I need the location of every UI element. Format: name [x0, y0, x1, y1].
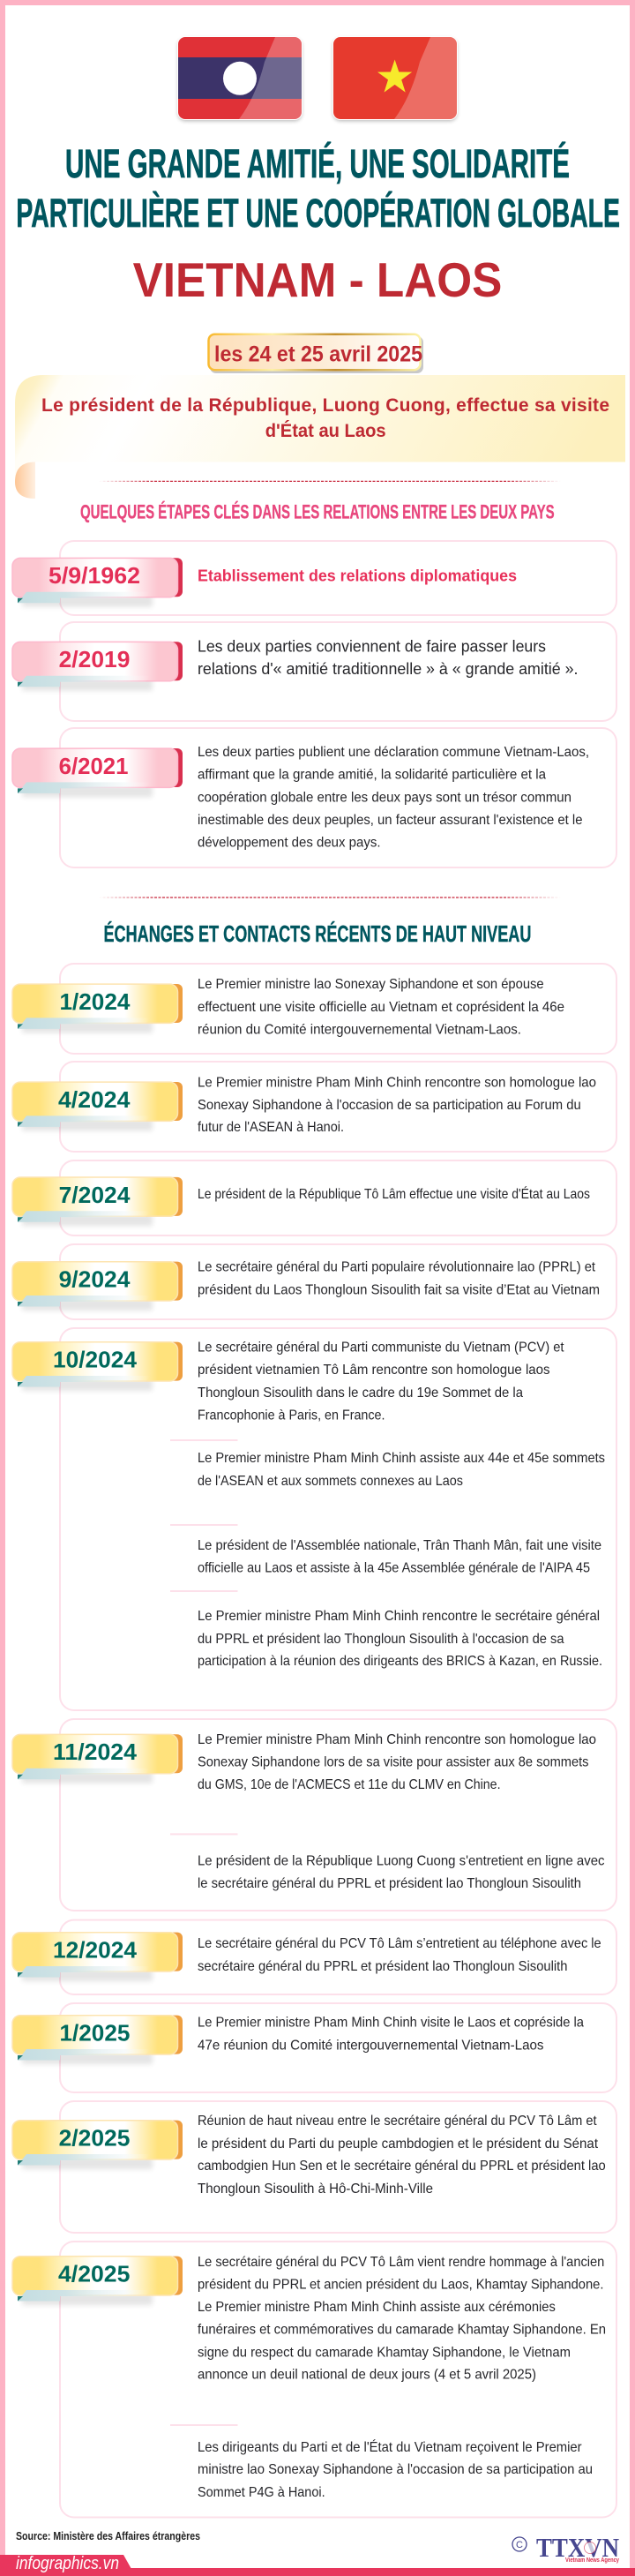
icon: flag of Laos: [177, 36, 303, 121]
card: 5/9/1962: 5/9/1962: [49, 564, 140, 589]
panel: recent high-level exchanges: [12, 964, 616, 2517]
logo: TTXVN: C: [516, 2540, 523, 2550]
card: 7/2024: [12, 1160, 616, 1235]
card: 1/2024: Le Premier ministre lao Sonexay Siphandone et son épouse: [198, 977, 544, 992]
footer bar: infographics.vn: [0, 2554, 635, 2576]
card: 5/9/1962: Etablissement des relations diplomatiques: [198, 567, 517, 584]
card: 2/2025: Thongloun Sisoulith à Hô-Chi-Minh-Ville: [198, 2182, 433, 2197]
card: 2/2019: 2/2019: [59, 648, 130, 672]
card: 10/2024: Thongloun Sisoulith dans le cadre du 19e Sommet de la: [198, 1386, 523, 1401]
card: 4/2024: futur de l'ASEAN à Hanoi.: [198, 1120, 344, 1135]
card: 11/2024: Le président de la République Luong Cuong s'entretient en ligne avec: [198, 1854, 605, 1869]
card: 9/2024: [12, 1244, 616, 1319]
card: 11/2024: Le Premier ministre Pham Minh Chinh rencontre son homologue lao: [198, 1732, 596, 1747]
card: 6/2021: [12, 728, 616, 867]
card: 4/2024: Sonexay Siphandone à l'occasion de sa participation au Forum du: [198, 1098, 581, 1113]
card: 9/2024: président du Laos Thongloun Sisoulith fait sa visite d’Etat au Vietnam: [198, 1283, 600, 1297]
title: [16, 141, 620, 236]
card: 1/2025: 47e réunion du Comité intergouvernemental Vietnam-Laos: [198, 2038, 543, 2053]
card: 12/2024: [12, 1920, 616, 1994]
card: 2/2025: 2/2025: [59, 2127, 130, 2152]
card: 4/2025: Les dirigeants du Parti et de l'État du Vietnam reçoivent le Premier: [198, 2438, 582, 2455]
card: 4/2025: Le secrétaire général du PCV Tô Lâm vient rendre hommage à l'ancien: [198, 2255, 604, 2270]
card: 11/2024: [12, 1719, 616, 1911]
card: 1/2024: [12, 964, 616, 1054]
card: 6/2021: coopération globale entre les deux pays sont un trésor commun: [198, 790, 572, 805]
card: 2/2025: cambodgien Hun Sen et le secrétaire général du PPRL et président lao: [198, 2159, 606, 2174]
card: 4/2025: président du PPRL et ancien président du Laos, Khamtay Siphandone.: [198, 2277, 603, 2292]
card: 2/2019: relations d'« amitié traditionnelle » à « grande amitié ».: [198, 660, 579, 678]
card: 4/2025: ministre lao Sonexay Siphandone à l'occasion de sa participation au: [198, 2462, 593, 2477]
date badge: les 24 et 25 avril 2025: [214, 342, 422, 367]
card: 4/2024: [12, 1062, 616, 1152]
card: 9/2024: 9/2024: [59, 1267, 131, 1292]
card: 1/2025: Le Premier ministre Pham Minh Chinh visite le Laos et copréside la: [198, 2016, 584, 2031]
card: 6/2021: 6/2021: [59, 755, 129, 779]
card: 9/2024: Le secrétaire général du Parti populaire révolutionnaire lao (PPRL) et: [198, 1260, 596, 1274]
card: 10/2024: du PPRL et président lao Thongloun Sisoulith à l'occasion de sa: [198, 1632, 564, 1647]
footer bar: infographics.vn: infographics.vn: [16, 2554, 119, 2573]
card: 6/2021: affirmant que la grande amitié, la solidarité particulière et la: [198, 768, 546, 783]
card: 2/2019: Les deux parties conviennent de faire passer leurs: [198, 637, 546, 655]
card: 7/2024: Le président de la République Tô Lâm effectue une visite d'État au Laos: [198, 1185, 590, 1202]
card: 4/2025: signe du respect du camarade Khamtay Siphandone, le Vietnam: [198, 2345, 571, 2360]
card: 2/2025: le président du Parti du peuple cambdogien et le président du Sénat: [198, 2137, 599, 2152]
card: 11/2024: Sonexay Siphandone lors de sa visite pour assister aux 8e sommets: [198, 1754, 589, 1770]
card: 4/2025: Sommet P4G à Hanoi.: [198, 2485, 325, 2500]
card: 1/2024: 1/2024: [60, 990, 131, 1015]
card: 10/2024: officielle au Laos et assiste à la 45e Assemblée générale de l'AIPA 45: [198, 1560, 590, 1575]
card: 10/2024: Le Premier ministre Pham Minh Chinh assiste aux 44e et 45e sommets: [198, 1451, 605, 1466]
card: 10/2024: Le secrétaire général du Parti communiste du Vietnam (PCV) et: [198, 1341, 564, 1356]
card: 1/2025: 1/2025: [60, 2021, 130, 2046]
card: 10/2024: Le président de l'Assemblée nationale, Trân Thanh Mân, fait une visite: [198, 1538, 601, 1553]
card: 4/2025: 4/2025: [58, 2263, 130, 2287]
card: 2/2019: [12, 622, 616, 721]
card: 4/2024: Le Premier ministre Pham Minh Chinh rencontre son homologue lao: [198, 1075, 596, 1091]
card: 5/9/1962: [12, 541, 616, 615]
card: 10/2024: Le Premier ministre Pham Minh Chinh rencontre le secrétaire général: [198, 1609, 600, 1624]
card: 10/2024: 10/2024: [53, 1348, 138, 1373]
card: 12/2024: secrétaire général du PPRL et président lao Thongloun Sisoulith: [198, 1959, 568, 1974]
card: 10/2024: de l'ASEAN et aux sommets connexes au Laos: [198, 1474, 463, 1489]
card: 7/2024: 7/2024: [59, 1183, 131, 1208]
card: 4/2025: annonce un deuil national de deux jours (4 et 5 avril 2025): [198, 2368, 536, 2383]
icon: flag of Vietnam: [332, 36, 458, 121]
banner: visit announcement: [15, 375, 625, 499]
logo: TTXVN: Vietnam News Agency: [565, 2557, 619, 2564]
logo: TTXVN: [512, 2532, 619, 2564]
banner: visit announcement: Le président de la République, Luong Cuong, effectue sa visite: [41, 395, 609, 416]
card: 6/2021: inestimable des deux peuples, un facteur assurant l'existence et le: [198, 813, 582, 828]
card: 11/2024: du GMS, 10e de l'ACMECS et 11e du CLMV en Chine.: [198, 1777, 501, 1792]
card: 1/2024: réunion du Comité intergouvernemental Vietnam-Laos.: [198, 1022, 521, 1038]
card: 10/2024: Francophonie à Paris, en France.: [198, 1408, 385, 1423]
card: 4/2024: 4/2024: [58, 1088, 131, 1113]
card: 10/2024: président vietnamien Tô Lâm rencontre son homologue laos: [198, 1363, 550, 1378]
card: 1/2024: effectuent une visite officielle au Vietnam et coprésident la 46e: [198, 1000, 564, 1015]
card: 4/2025: funéraires et commémoratives du camarade Khamtay Siphandone. En: [198, 2323, 606, 2338]
card: 12/2024: Le secrétaire général du PCV Tô Lâm s’entretient au téléphone avec le: [198, 1936, 601, 1951]
card: 11/2024: le secrétaire général du PPRL et président lao Thongloun Sisoulith: [198, 1876, 581, 1891]
logo: TTXVN: TTXVN: [536, 2532, 619, 2563]
subtitle: Vietnam - Laos: VIETNAM - LAOS: [133, 253, 502, 307]
card: 11/2024: 11/2024: [53, 1740, 138, 1765]
card: 4/2025: [12, 2242, 616, 2517]
source note: Source: Ministère des Affaires étrangères: [16, 2530, 200, 2542]
card: 6/2021: Les deux parties publient une déclaration commune Vietnam-Laos,: [198, 745, 589, 760]
card: 2/2025: Réunion de haut niveau entre le secrétaire général du PCV Tô Lâm et: [198, 2114, 597, 2129]
card: 10/2024: [12, 1328, 616, 1710]
card: 2/2025: [12, 2101, 616, 2233]
banner: visit announcement: d'État au Laos: [265, 421, 386, 441]
card: 6/2021: développement des deux pays.: [198, 835, 381, 851]
card: 10/2024: participation à la réunion des dirigeants des BRICS à Kazan, en Russie.: [198, 1654, 602, 1669]
card: 4/2025: Le Premier ministre Pham Minh Chinh assiste aux cérémonies: [198, 2300, 556, 2315]
date badge: [208, 334, 423, 373]
panel: key milestones: [12, 541, 616, 867]
card: 12/2024: 12/2024: [53, 1938, 138, 1963]
card: 1/2025: [12, 2003, 616, 2092]
